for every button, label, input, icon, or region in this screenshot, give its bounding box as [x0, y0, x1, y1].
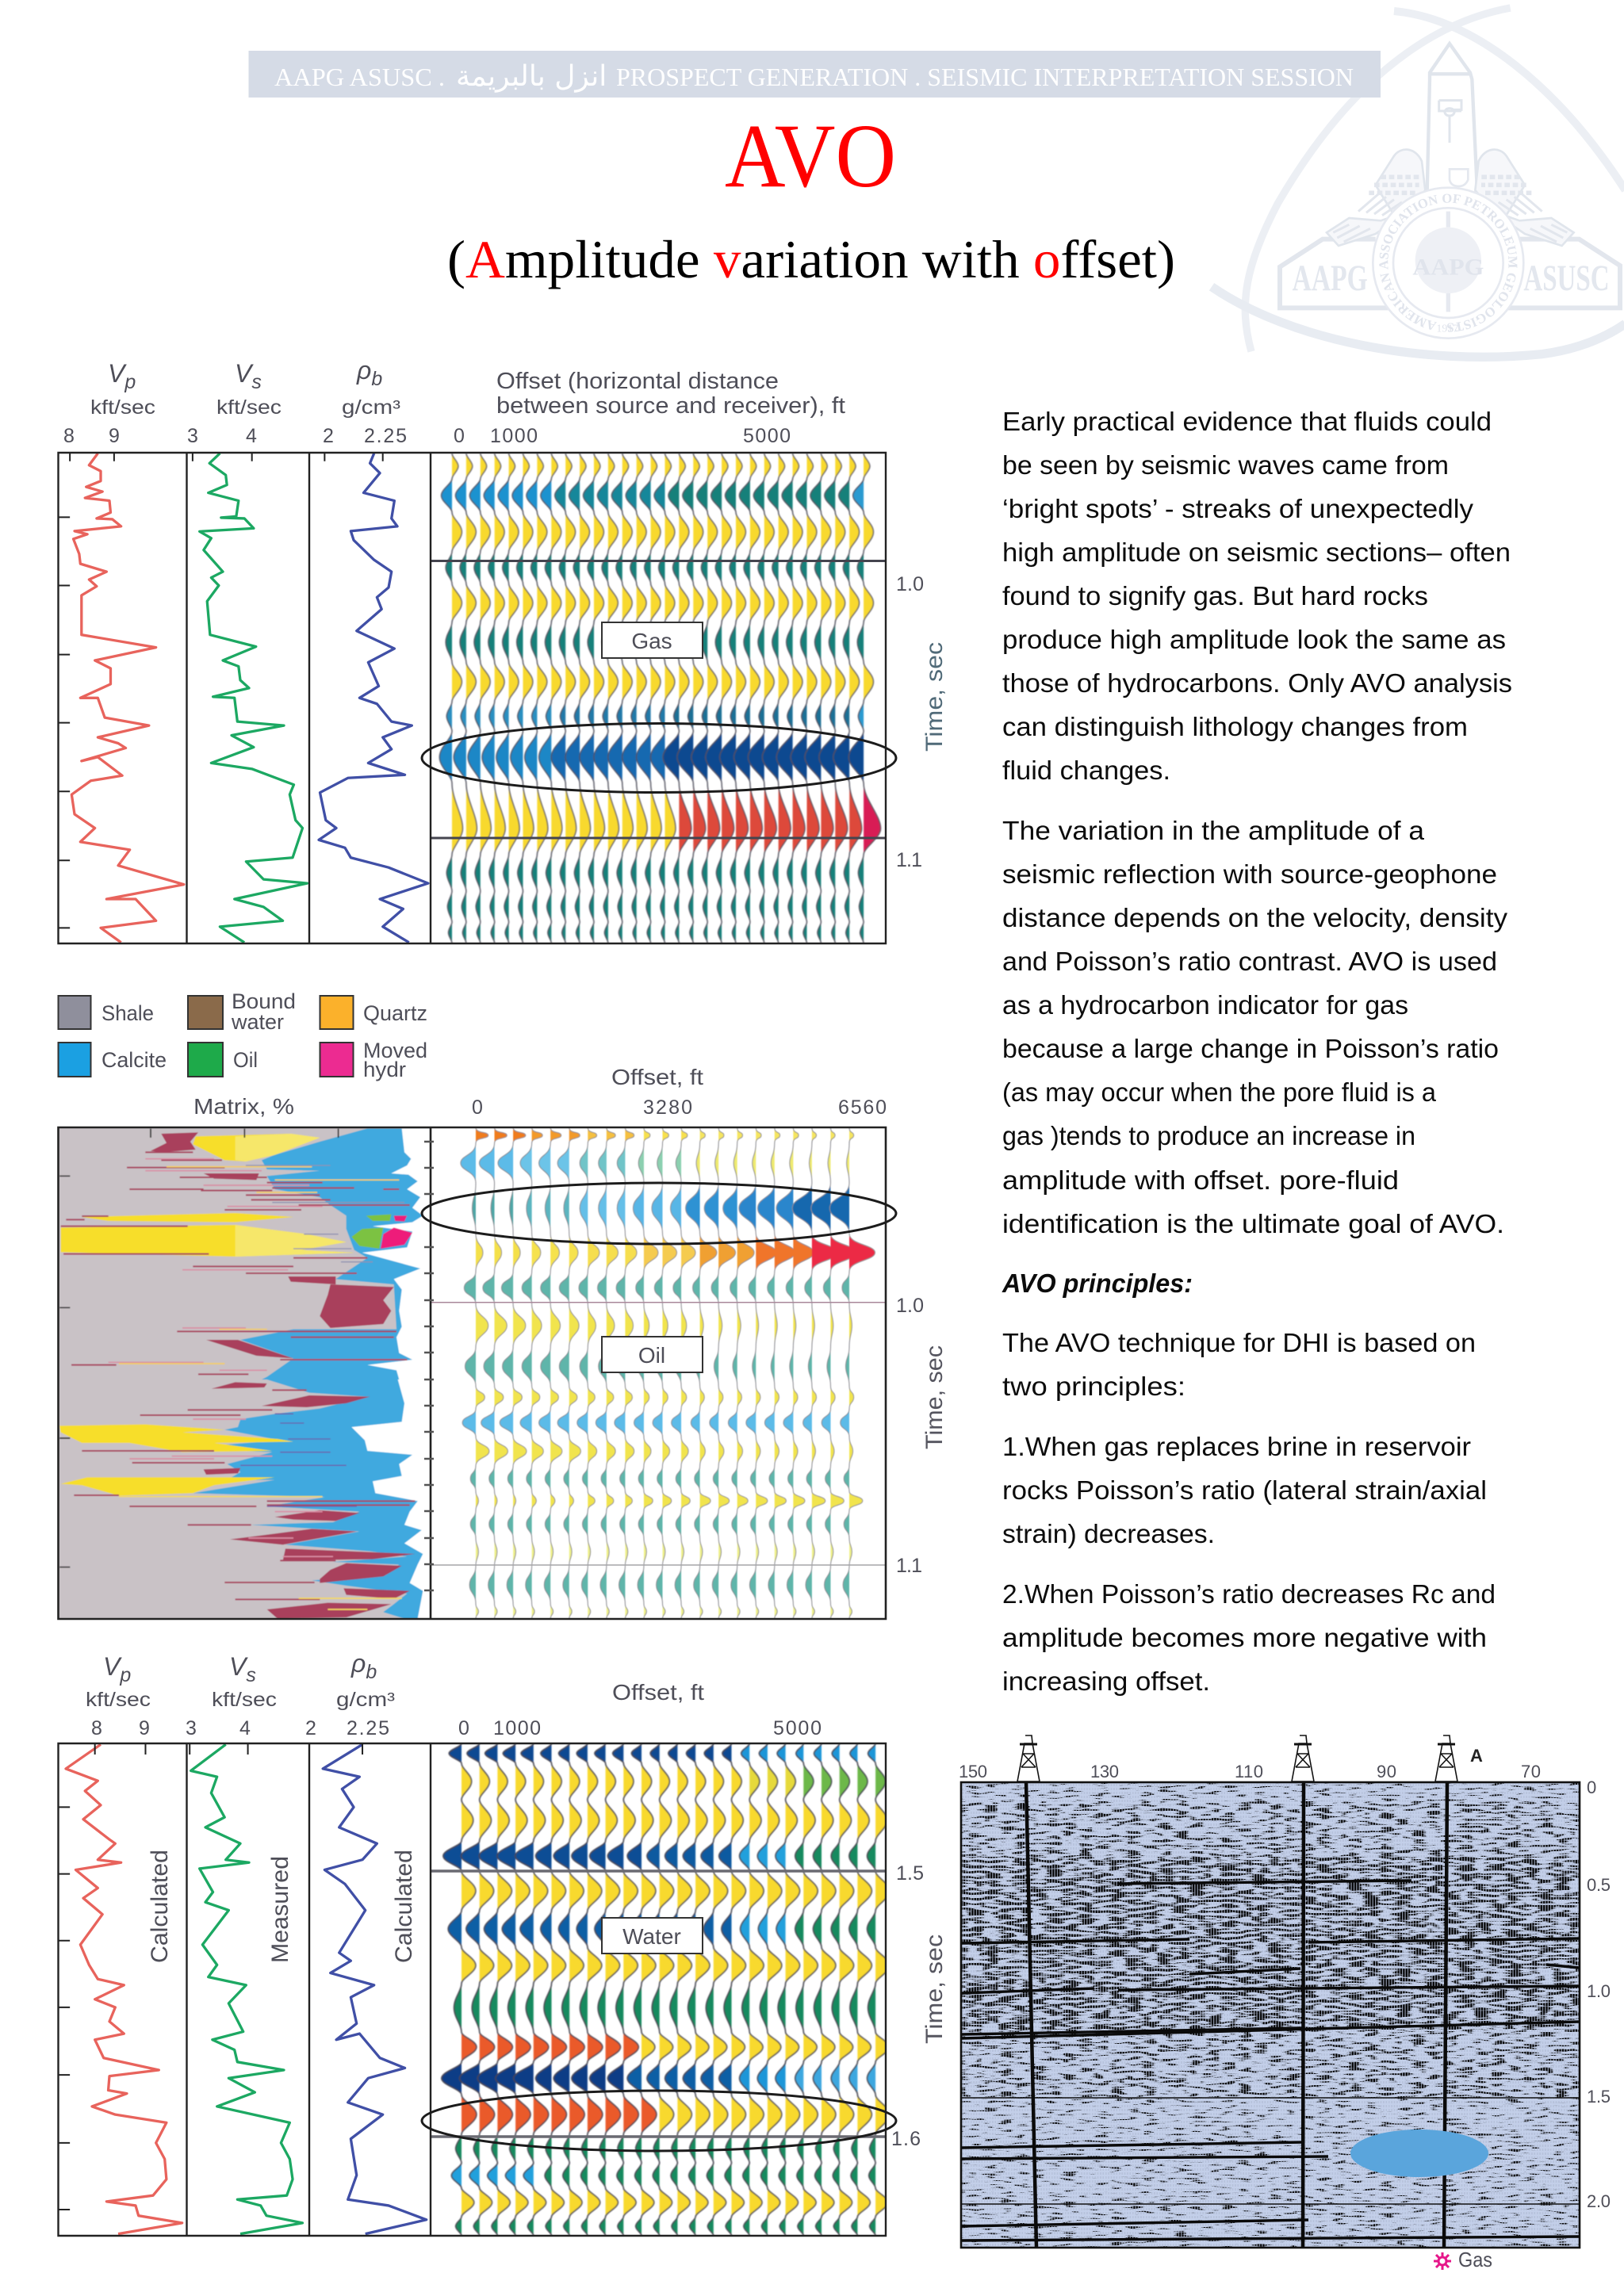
panel: gas well logs and gather: [58, 356, 948, 943]
axis headers: [193, 1065, 948, 1577]
panel: water well logs and gather: [58, 1649, 948, 2236]
body text: found to signify gas. But hard rocks: [1002, 581, 1428, 610]
section axis labels: 0.5: [1587, 1875, 1611, 1895]
axis headers: kft/sec: [216, 396, 282, 419]
axis headers: Time, sec: [921, 642, 948, 752]
axis headers: 3280: [643, 1096, 692, 1119]
axis headers: [86, 1649, 948, 2150]
axis headers: 1000: [490, 425, 538, 447]
header banner: AAPG ASUSC .: [274, 63, 445, 91]
axis headers: s: [251, 371, 262, 393]
axis headers: 0: [472, 1096, 483, 1119]
axis headers: Matrix, %: [193, 1094, 294, 1119]
axis headers: 4: [239, 1717, 251, 1739]
axis headers: V: [108, 359, 124, 388]
header banner: PROSPECT GENERATION . SEISMIC INTERPRETATION SESSION: [616, 63, 1354, 91]
axis headers: 8: [91, 1717, 102, 1739]
axis headers: 0: [458, 1717, 469, 1739]
axis headers: V: [229, 1652, 246, 1681]
axis headers: V: [103, 1652, 120, 1681]
axis headers: 2.25: [364, 425, 407, 447]
body text: seismic reflection with source-geophone: [1002, 859, 1497, 889]
section image: [961, 1782, 1580, 2248]
watermark logo: AAPG ASUSC: AAPG: [1293, 258, 1368, 299]
legend: Shale: [102, 1001, 154, 1025]
body text: because a large change in Poisson’s ratio: [1002, 1034, 1499, 1063]
section axis labels: 1.5: [1587, 2087, 1611, 2107]
section axis labels: A: [1470, 1746, 1483, 1766]
body text: distance depends on the velocity, density: [1002, 903, 1508, 932]
axis headers: Time, sec: [921, 1934, 948, 2044]
legend: Moved: [363, 1039, 427, 1062]
section axis labels: [959, 1746, 1611, 2211]
label: Gas: Gas: [631, 629, 672, 653]
axis headers: 1.6: [891, 2128, 921, 2150]
axis headers: ρ: [351, 1649, 366, 1678]
axis headers: 2: [323, 425, 334, 447]
legend: Calcite: [102, 1048, 167, 1072]
section axis labels: 0: [1587, 1777, 1596, 1797]
axis headers: 1.1: [896, 849, 922, 871]
frame and depth ticks: [59, 1127, 886, 1619]
legend: [59, 989, 427, 1081]
ellipse highlighting oil anomaly: [422, 1183, 896, 1244]
axis headers: Offset, ft: [611, 1065, 703, 1089]
section axis labels: 150: [959, 1762, 987, 1781]
axis headers: p: [119, 1664, 131, 1686]
body text: (as may occur when the pore fluid is a: [1002, 1077, 1437, 1107]
section axis labels: 70: [1521, 1762, 1541, 1781]
axis headers: 9: [139, 1717, 150, 1739]
body text: increasing offset.: [1002, 1667, 1210, 1696]
axis headers: 4: [246, 425, 257, 447]
body text: amplitude with offset. pore-fluid: [1002, 1165, 1399, 1195]
axis headers: Calculated: [147, 1850, 173, 1963]
log curves: Vp, Vs, density: [58, 452, 428, 943]
legend: Oil: [233, 1048, 258, 1072]
body text: high amplitude on seismic sections– often: [1002, 538, 1511, 567]
axis headers: kft/sec: [212, 1689, 277, 1711]
watermark logo: AAPG ASUSC: AAPG: [1412, 254, 1484, 281]
subtitle: (Amplitude variation with offset): [447, 229, 1175, 289]
axis headers: Offset, ft: [612, 1680, 704, 1705]
axis headers: 3: [187, 425, 198, 447]
title: AVO: [725, 105, 896, 206]
label: Water: Water: [622, 1924, 681, 1949]
axis headers: s: [246, 1664, 256, 1686]
axis headers: 1.0: [896, 1295, 924, 1317]
axis headers: between source and receiver), ft: [496, 393, 845, 419]
label: Gas: [602, 622, 703, 658]
label: Oil: Oil: [638, 1343, 665, 1368]
ellipse highlighting water anomaly: [422, 2091, 896, 2151]
axis headers: ρ: [357, 356, 371, 385]
axis headers: [63, 356, 948, 871]
axis headers: 1.1: [896, 1555, 922, 1577]
axis headers: 5000: [743, 425, 791, 447]
axis headers: 2.25: [347, 1717, 389, 1739]
body text: amplitude becomes more negative with: [1002, 1623, 1487, 1652]
section axis labels: 2.0: [1587, 2191, 1611, 2211]
chart frame: [59, 1743, 886, 2236]
body text: [1002, 407, 1512, 1696]
gas marker: [1434, 2248, 1492, 2271]
panel: seismic section with bright spot: [959, 1735, 1611, 2271]
legend: Bound: [232, 989, 296, 1013]
axis headers: g/cm³: [336, 1689, 395, 1711]
ellipse highlighting gas anomaly: [422, 723, 896, 793]
legend: Quartz: [363, 1001, 427, 1025]
legend: hydr: [363, 1058, 406, 1081]
body text: 2.When Poisson’s ratio decreases Rc and: [1002, 1579, 1496, 1609]
body text: two principles:: [1002, 1372, 1185, 1401]
section axis labels: 1.0: [1587, 1981, 1611, 2001]
body text: and Poisson’s ratio contrast. AVO is used: [1002, 947, 1497, 976]
axis headers: 6560: [838, 1096, 887, 1119]
axis headers: b: [371, 368, 382, 390]
axis headers: 2: [305, 1717, 316, 1739]
body text: can distinguish lithology changes from: [1002, 712, 1468, 741]
header banner: انزل بالبريمة: [456, 60, 607, 93]
legend: water: [231, 1010, 284, 1034]
axis headers: 0: [454, 425, 465, 447]
axis headers: p: [124, 371, 136, 393]
seismic gather: water: [431, 1743, 890, 2236]
body text: gas )tends to produce an increase in: [1002, 1121, 1415, 1150]
body text: rocks Poisson’s ratio (lateral strain/axial: [1002, 1475, 1487, 1505]
body text: produce high amplitude look the same as: [1002, 625, 1506, 654]
chart frame: [59, 453, 886, 943]
watermark logo: AAPG ASUSC: 1917: [1436, 323, 1458, 335]
body text: those of hydrocarbons. Only AVO analysis: [1002, 668, 1512, 698]
body text: fluid changes.: [1002, 756, 1170, 785]
body text: identification is the ultimate goal of AVO.: [1002, 1209, 1504, 1238]
section axis labels: 110: [1235, 1762, 1263, 1781]
seismic gather: gas: [431, 453, 886, 943]
watermark logo: AAPG ASUSC: [1209, 5, 1624, 362]
axis headers: Measured: [267, 1856, 293, 1963]
label: Oil: [602, 1337, 703, 1372]
axis headers: kft/sec: [90, 396, 155, 419]
axis headers: 1000: [493, 1717, 541, 1739]
axis headers: Calculated: [391, 1850, 417, 1963]
body text: ‘bright spots’ - streaks of unexpectedly: [1002, 494, 1474, 523]
axis headers: 1.5: [896, 1862, 924, 1885]
axis headers: Time, sec: [921, 1345, 948, 1449]
matrix lithology log: [59, 1127, 431, 1619]
axis headers: 1.0: [896, 573, 924, 595]
axis headers: kft/sec: [86, 1689, 151, 1711]
body text: 1.When gas replaces brine in reservoir: [1002, 1432, 1471, 1461]
body text: The variation in the amplitude of a: [1002, 816, 1425, 845]
axis headers: g/cm³: [342, 396, 400, 419]
body text: AVO principles:: [1002, 1269, 1193, 1298]
axis headers: 5000: [773, 1717, 822, 1739]
gas marker: Gas: [1458, 2248, 1492, 2271]
body text: as a hydrocarbon indicator for gas: [1002, 990, 1408, 1020]
watermark logo: AAPG ASUSC: AMERICAN ASSOCIATION OF PETROLEUM GEOLOGISTS: [1379, 193, 1518, 332]
body text: strain) decreases.: [1002, 1519, 1215, 1548]
label: Water: [602, 1918, 703, 1954]
seismic gather: oil: [431, 1127, 886, 1619]
axis headers: 9: [109, 425, 120, 447]
axis headers: 3: [186, 1717, 197, 1739]
body text: Early practical evidence that fluids could: [1002, 407, 1492, 436]
section axis labels: 90: [1377, 1762, 1396, 1781]
axis headers: b: [366, 1661, 377, 1683]
body text: The AVO technique for DHI is based on: [1002, 1328, 1476, 1357]
section axis labels: 130: [1090, 1762, 1119, 1781]
header banner: [249, 51, 1381, 98]
axis headers: V: [235, 359, 251, 388]
body text: be seen by seismic waves came from: [1002, 450, 1449, 480]
log curves: Vp, Vs, density: [58, 1743, 427, 2234]
axis headers: 8: [63, 425, 75, 447]
axis headers: Offset (horizontal distance: [496, 369, 779, 394]
icon: well derricks: [1017, 1735, 1457, 1781]
panel: oil matrix log and gather: [59, 1065, 948, 1619]
